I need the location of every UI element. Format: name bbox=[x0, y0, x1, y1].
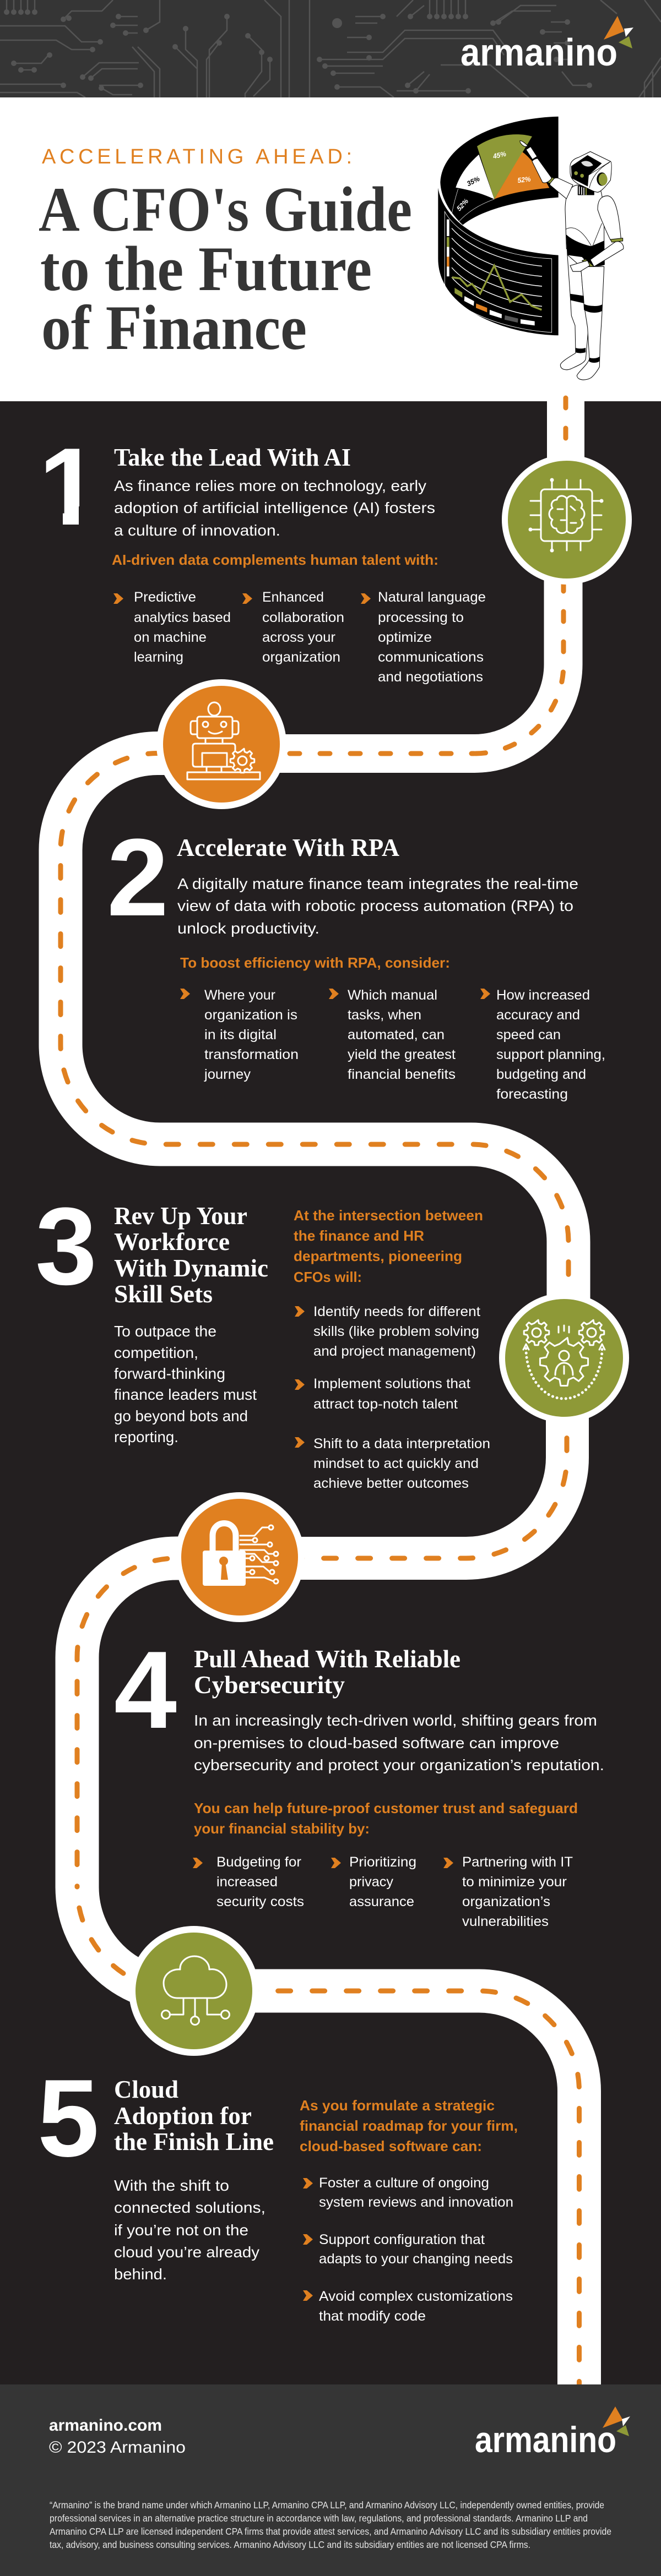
intro paragraph 1: As finance relies more on technology, early bbox=[114, 477, 426, 494]
list item: avoid customizations: that modify code bbox=[319, 2308, 426, 2324]
list item: configuration: adapts to your changing needs bbox=[319, 2251, 513, 2267]
list item: manual tasks: yield the greatest bbox=[348, 1047, 456, 1062]
intro paragraph 1: adoption of artificial intelligence (AI) fosters bbox=[114, 499, 435, 516]
list item: manual tasks bbox=[329, 987, 456, 1082]
list item: manual tasks: automated, can bbox=[348, 1027, 445, 1043]
icon: padlock with circuits in orange circle bbox=[175, 1492, 305, 1622]
list item: natural language processing: communications bbox=[378, 650, 484, 665]
list item: avoid customizations: Avoid complex customizations bbox=[319, 2289, 513, 2304]
orange subhead 4: your financial stability by: bbox=[194, 1820, 370, 1837]
intro paragraph 4: on-premises to cloud-based software can improve bbox=[194, 1734, 559, 1751]
list item: culture of reviews bbox=[303, 2175, 513, 2210]
curved dashboard: line chart bbox=[438, 188, 559, 335]
intro paragraph 3: forward-thinking bbox=[114, 1365, 225, 1382]
list item: privacy: privacy bbox=[349, 1874, 394, 1890]
list item: digital transformation: transformation bbox=[204, 1047, 299, 1062]
intro paragraph 3 bbox=[114, 1323, 257, 1445]
orange subhead 3: At the intersection between bbox=[294, 1207, 483, 1224]
intro paragraph 4: cybersecurity and protect your organization’s reputation. bbox=[194, 1756, 604, 1773]
orange subhead 5: financial roadmap for your firm, bbox=[300, 2117, 518, 2134]
footer bbox=[49, 2406, 630, 2550]
list item: culture of reviews: system reviews and innovation bbox=[319, 2195, 513, 2210]
orange subhead 2: To boost efficiency with RPA, consider: bbox=[180, 954, 450, 971]
disclaimer: tax, advisory, and business consulting services. Armanino Advisory LLC and its subsidiary entities are not licensed CPA firms. bbox=[50, 2539, 530, 2550]
orange subhead 3: the finance and HR bbox=[294, 1227, 424, 1244]
orange subhead 4: You can help future-proof customer trust and safeguard bbox=[194, 1800, 578, 1816]
list item: identify needs: and project management) bbox=[313, 1344, 476, 1359]
heading 3: Workforce bbox=[114, 1227, 230, 1256]
list item: data interpretation mindset: Shift to a data interpretation bbox=[313, 1436, 490, 1451]
list item: manual tasks: tasks, when bbox=[348, 1007, 421, 1023]
intro paragraph 2: view of data with robotic process automation (RPA) to bbox=[177, 897, 573, 914]
disclaimer: Armanino CPA LLP are licensed independent CPA firms that provide attest services, and Armanino Advisory LLC and its subsidiary entities provide bbox=[50, 2526, 611, 2537]
list item: data interpretation mindset: mindset to act quickly and bbox=[313, 1456, 479, 1471]
list item: enhanced collaboration: Enhanced bbox=[262, 590, 324, 605]
intro paragraph 3: reporting. bbox=[114, 1428, 178, 1445]
curved dashboard: pie chart: 35% bbox=[466, 174, 481, 188]
main title: of Finance bbox=[41, 293, 307, 363]
eyebrow: accelerating ahead: ACCELERATING AHEAD: bbox=[42, 145, 352, 168]
panel: step 3 rev up your workforce bbox=[35, 1185, 490, 1491]
footer contact: armanino.com bbox=[49, 2416, 162, 2435]
list item: implement solutions: attract top-notch talent bbox=[313, 1396, 458, 1412]
robot figure bbox=[520, 141, 624, 380]
list item: enhanced collaboration: organization bbox=[262, 650, 340, 665]
orange subhead 3 bbox=[294, 1207, 483, 1285]
list item: natural language processing: and negotiations bbox=[378, 669, 483, 685]
logo: armanino header: armanino bbox=[460, 31, 617, 74]
intro paragraph 3: go beyond bots and bbox=[114, 1407, 248, 1425]
icon: brain on chip in olive circle bbox=[502, 455, 632, 585]
white title panel bbox=[0, 97, 661, 401]
intro paragraph 4: In an increasingly tech-driven world, shifting gears from bbox=[194, 1712, 597, 1729]
heading 4 bbox=[194, 1645, 460, 1699]
heading 3 bbox=[114, 1202, 268, 1308]
list item: culture of reviews: Foster a culture of ongoing bbox=[319, 2175, 489, 2191]
number 1: 1 bbox=[39, 425, 100, 548]
panel: step 5 cloud adoption bbox=[37, 2057, 518, 2324]
list item: privacy: Prioritizing bbox=[349, 1854, 416, 1870]
main title: to the Future bbox=[40, 234, 372, 304]
heading 3: Rev Up Your bbox=[114, 1202, 247, 1230]
list item: data interpretation mindset bbox=[295, 1436, 490, 1491]
curved dashboard: pie chart: 45% bbox=[492, 150, 507, 161]
heading 5: the Finish Line bbox=[114, 2127, 274, 2155]
panel: step 1 take the lead with AI bbox=[33, 425, 486, 685]
list item: digital transformation: Where your bbox=[204, 987, 275, 1003]
intro paragraph 5: if you’re not on the bbox=[114, 2222, 248, 2239]
number 3: 3 bbox=[35, 1185, 97, 1308]
list item: configuration: Support configuration that bbox=[319, 2232, 485, 2247]
intro paragraph 3: To outpace the bbox=[114, 1323, 216, 1340]
list item: privacy: assurance bbox=[349, 1894, 414, 1909]
curved dashboard: pie chart bbox=[440, 117, 559, 225]
orange subhead 4 bbox=[194, 1800, 578, 1837]
orange subhead 3: departments, pioneering bbox=[294, 1248, 462, 1264]
heading 2: Accelerate With RPA bbox=[177, 833, 399, 861]
list item: predictive analytics: learning bbox=[134, 650, 183, 665]
intro paragraph 5: connected solutions, bbox=[114, 2199, 266, 2216]
curved dashboard: pie chart: 52% bbox=[455, 197, 470, 212]
heading 5 bbox=[114, 2075, 274, 2155]
list item: natural language processing bbox=[361, 590, 486, 685]
list item: budgeting bbox=[193, 1854, 304, 1909]
list item: natural language processing: processing to bbox=[378, 610, 464, 625]
orange subhead 5 bbox=[300, 2097, 518, 2154]
list item: implement solutions: Implement solutions that bbox=[313, 1376, 470, 1391]
orange subhead 5: cloud-based software can: bbox=[300, 2138, 482, 2154]
intro paragraph 2: A digitally mature finance team integrates the real-time bbox=[177, 875, 578, 892]
panel: step 2 accelerate with RPA bbox=[107, 816, 605, 1102]
icon: cloud network in olive circle bbox=[129, 1926, 259, 2056]
list item: accuracy and speed: support planning, bbox=[496, 1047, 605, 1062]
intro paragraph 4 bbox=[194, 1712, 604, 1773]
list item: digital transformation bbox=[180, 987, 299, 1082]
list item: natural language processing: Natural language bbox=[378, 590, 486, 605]
list item: accuracy and speed: accuracy and bbox=[496, 1007, 580, 1023]
list item: digital transformation: in its digital bbox=[204, 1027, 277, 1043]
footer contact bbox=[49, 2416, 186, 2457]
logo: armanino footer: armanino bbox=[475, 2419, 616, 2460]
main title bbox=[39, 174, 412, 363]
list item: identify needs bbox=[295, 1304, 480, 1359]
list item: digital transformation: journey bbox=[204, 1067, 251, 1082]
main title: A CFO's Guide bbox=[39, 174, 412, 245]
list item: avoid customizations bbox=[303, 2289, 513, 2324]
list item: predictive analytics: Predictive bbox=[134, 590, 196, 605]
intro paragraph 3: competition, bbox=[114, 1344, 198, 1361]
list item: data interpretation mindset: achieve better outcomes bbox=[313, 1476, 469, 1491]
heading 5: Adoption for bbox=[114, 2102, 252, 2130]
intro paragraph 1: a culture of innovation. bbox=[114, 522, 280, 539]
list item: accuracy and speed: forecasting bbox=[496, 1087, 568, 1102]
list item: accuracy and speed: How increased bbox=[496, 987, 590, 1003]
intro paragraph 2 bbox=[177, 875, 578, 937]
heading 3: With Dynamic bbox=[114, 1254, 268, 1282]
footer contact: © 2023 Armanino bbox=[49, 2438, 186, 2457]
orange subhead 5: As you formulate a strategic bbox=[300, 2097, 495, 2114]
curved dashboard: pie chart: 52% bbox=[517, 175, 531, 184]
intro paragraph 2: unlock productivity. bbox=[177, 920, 319, 937]
title block bbox=[39, 145, 412, 363]
list item: enhanced collaboration: across your bbox=[262, 630, 335, 645]
list item: implement solutions bbox=[295, 1376, 470, 1412]
list item: predictive analytics: on machine bbox=[134, 630, 207, 645]
list item: digital transformation: organization is bbox=[204, 1007, 297, 1023]
orange subhead 3: CFOs will: bbox=[294, 1269, 362, 1285]
heading 4: Cybersecurity bbox=[194, 1671, 345, 1699]
intro paragraph 5 bbox=[114, 2177, 266, 2283]
number 5: 5 bbox=[37, 2057, 99, 2180]
intro paragraph 5: cloud you’re already bbox=[114, 2244, 259, 2261]
list item: budgeting: increased bbox=[216, 1874, 278, 1890]
list item: manual tasks: Which manual bbox=[348, 987, 437, 1003]
list item: accuracy and speed: budgeting and bbox=[496, 1067, 586, 1082]
list item: partnering with IT bbox=[443, 1854, 573, 1929]
list item: partnering with IT: vulnerabilities bbox=[462, 1914, 549, 1929]
heading 5: Cloud bbox=[114, 2075, 178, 2103]
intro paragraph 3: finance leaders must bbox=[114, 1386, 257, 1403]
illustration: robot pointing at curved dashboard bbox=[438, 117, 624, 380]
list item: budgeting: Budgeting for bbox=[216, 1854, 301, 1870]
icon: gears and person in olive circle bbox=[499, 1293, 629, 1423]
list item: natural language processing: optimize bbox=[378, 630, 432, 645]
disclaimer: “Armanino” is the brand name under which Armanino LLP, Armanino CPA LLP, and Armanino Advisory LLC, independently owned entities, provide bbox=[50, 2499, 604, 2510]
number 4: 4 bbox=[114, 1629, 177, 1751]
list item: identify needs: skills (like problem solving bbox=[313, 1324, 479, 1339]
list item: accuracy and speed: speed can bbox=[496, 1027, 561, 1043]
list item: privacy bbox=[331, 1854, 416, 1909]
list item: configuration bbox=[303, 2232, 513, 2267]
list item: accuracy and speed bbox=[480, 987, 605, 1102]
number 2: 2 bbox=[107, 816, 169, 939]
list item: predictive analytics bbox=[113, 590, 231, 665]
disclaimer: professional services in an alternative practice structure in accordance with law, regulations, and professional standards. Armanino LLP and bbox=[50, 2513, 588, 2524]
orange subhead 1: AI-driven data complements human talent with: bbox=[112, 552, 438, 568]
list item: identify needs: Identify needs for different bbox=[313, 1304, 480, 1319]
intro paragraph 5: behind. bbox=[114, 2266, 167, 2283]
list item: budgeting: security costs bbox=[216, 1894, 304, 1909]
heading 4: Pull Ahead With Reliable bbox=[194, 1645, 460, 1673]
list item: partnering with IT: to minimize your bbox=[462, 1874, 567, 1890]
list item: partnering with IT: Partnering with IT bbox=[462, 1854, 573, 1870]
icon: robot at laptop in orange circle bbox=[156, 679, 286, 809]
header band with circuit pattern and logo bbox=[0, 0, 661, 97]
list item: predictive analytics: analytics based bbox=[134, 610, 231, 625]
disclaimer bbox=[50, 2499, 611, 2550]
list item: enhanced collaboration: collaboration bbox=[262, 610, 344, 625]
list item: enhanced collaboration bbox=[242, 590, 344, 665]
intro paragraph 5: With the shift to bbox=[114, 2177, 229, 2194]
panel: step 4 pull ahead with cybersecurity bbox=[114, 1629, 604, 1929]
intro paragraph 1 bbox=[114, 477, 435, 539]
list item: partnering with IT: organization’s bbox=[462, 1894, 550, 1909]
heading 3: Skill Sets bbox=[114, 1280, 213, 1308]
heading 1: Take the Lead With AI bbox=[114, 443, 351, 471]
list item: manual tasks: financial benefits bbox=[348, 1067, 456, 1082]
